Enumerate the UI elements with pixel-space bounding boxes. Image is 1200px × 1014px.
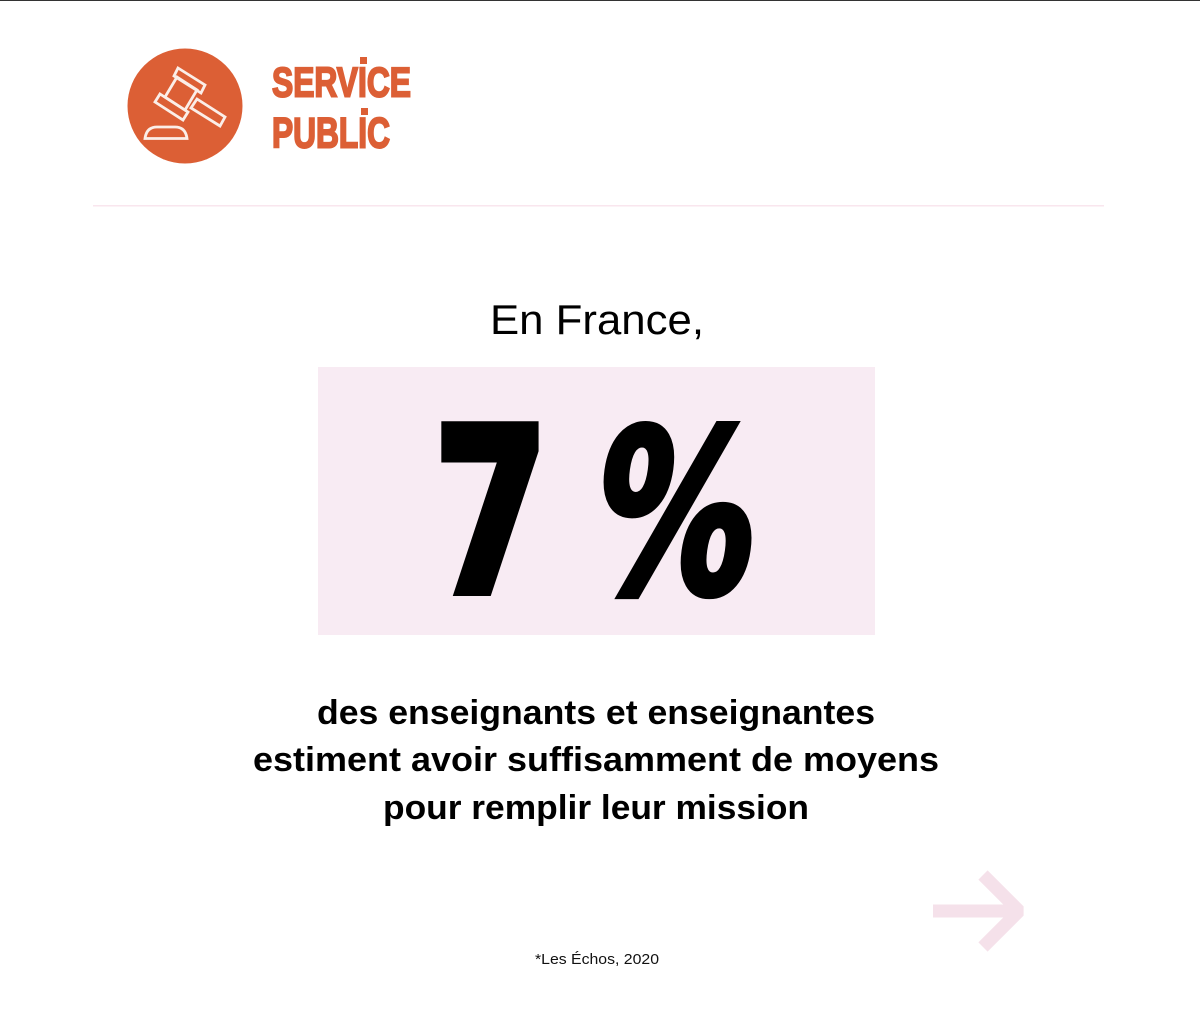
heading: service public: PUBLIC (272, 110, 390, 158)
icon: gavel in orange circle (128, 48, 242, 164)
source footnote: *Les Échos, 2020 (535, 951, 659, 968)
description text: pour remplir leur mission (383, 789, 809, 827)
heading: service public: SERVICE (272, 58, 411, 106)
description text (253, 694, 939, 827)
icon: next arrow (933, 875, 1019, 947)
heading: service public (272, 58, 411, 158)
description text: estiment avoir suffisamment de moyens (253, 741, 939, 779)
intro text: En France, (490, 296, 704, 343)
description text: des enseignants et enseignantes (317, 694, 875, 732)
panel: key figure (318, 367, 875, 646)
big number: 7 %: 7 (434, 382, 548, 645)
big number: 7 %: % (577, 384, 776, 646)
big number: 7 % (434, 382, 776, 646)
